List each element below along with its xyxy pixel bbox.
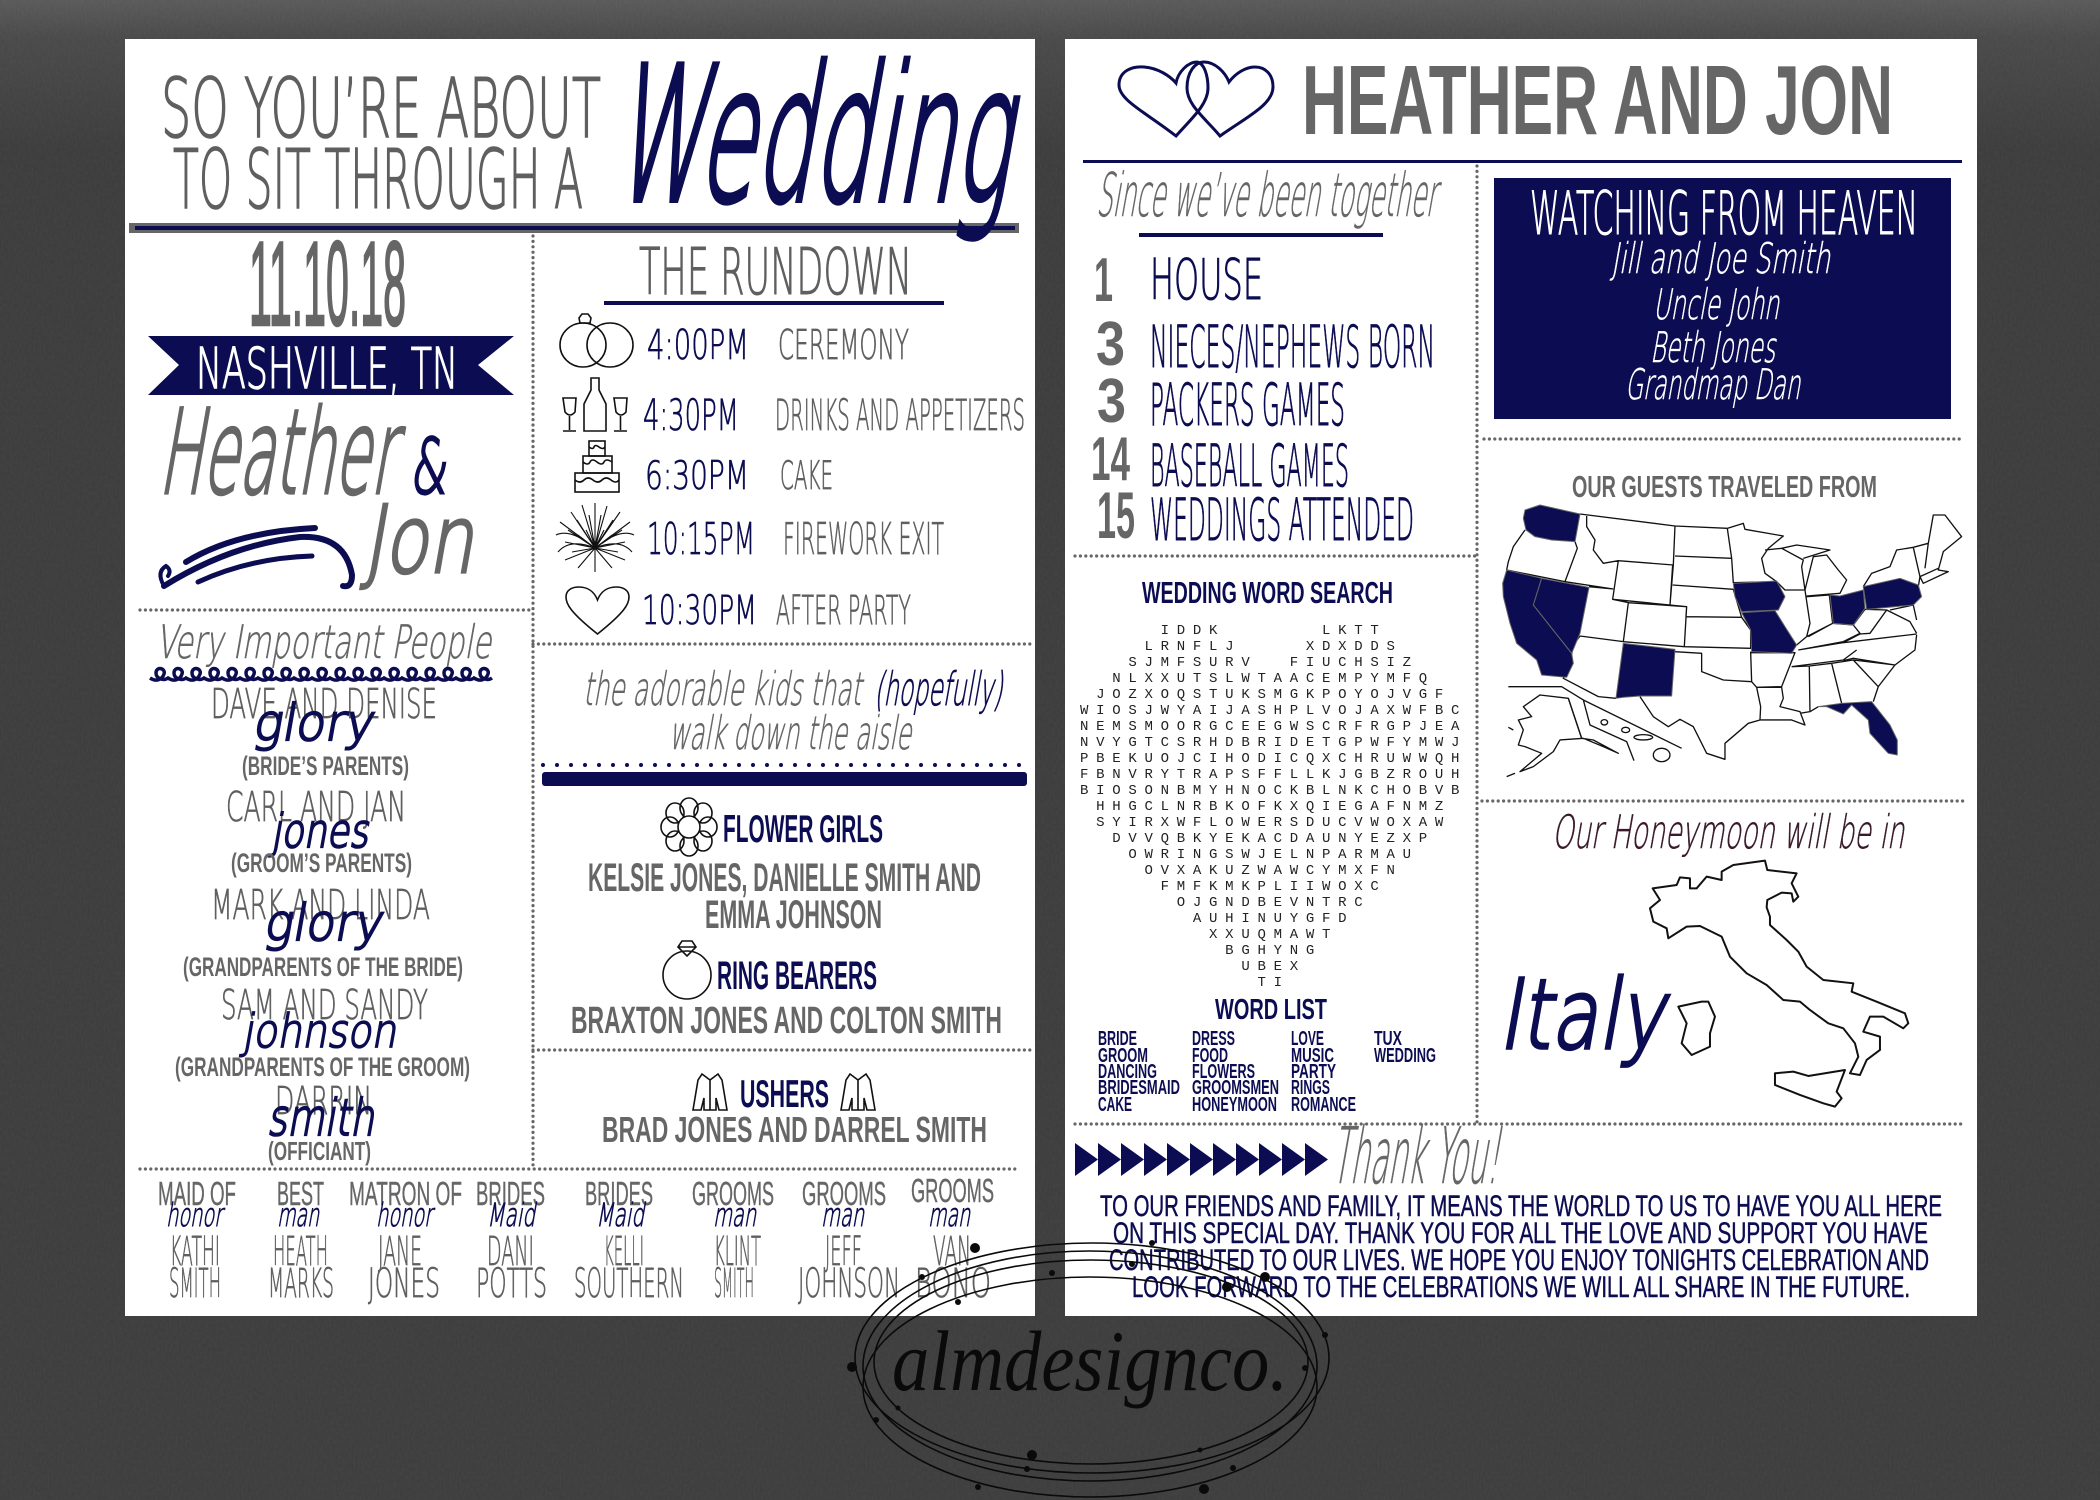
- heading: since we've been together: [1093, 161, 1446, 237]
- schedule item: drinks: 4:30PM: [643, 391, 739, 441]
- word search letter grid: SYIRXWFLOWERSDUCVWOXAW: [1080, 815, 1451, 831]
- party member: grooms man klint: man: [712, 1196, 761, 1234]
- schedule item: cake: CAKE: [780, 454, 833, 499]
- vip: officiant: DARRIN: [275, 1079, 372, 1123]
- arrow row: [1075, 1143, 1328, 1176]
- heading: adorable kids: walk down the aisle: [667, 706, 919, 760]
- vip: grandparents of the groom: [175, 981, 470, 1082]
- word search letter grid: FBNVRYTRAPSFFLLKJGBZROUH: [1080, 767, 1467, 783]
- party member: maid of honor: SMITH: [169, 1261, 221, 1307]
- thank you message: [1100, 1190, 1942, 1304]
- party member: matron of honor: JANE: [378, 1229, 422, 1275]
- stat: 15 weddings attended: 15: [1097, 478, 1135, 552]
- word list column 2: FOOD: [1192, 1045, 1228, 1067]
- flourish: [150, 669, 492, 680]
- word search letter grid: PBEKUOJCIHODICQXCHRUWWQH: [1080, 751, 1467, 767]
- word list column 3: RINGS: [1291, 1077, 1330, 1099]
- schedule item: firework exit: [647, 514, 944, 565]
- couple names script: Heather: [153, 385, 413, 521]
- swoosh ornament: [160, 528, 352, 586]
- party member: grooms man jeff: JOHNSON: [798, 1261, 900, 1307]
- party member: grooms man jeff: GROOMS: [802, 1175, 886, 1212]
- icon: tuxedo left: [693, 1074, 727, 1110]
- vip: grandparents of the groom: SAM AND SANDY: [221, 981, 428, 1029]
- stat: 14 baseball games: 14: [1091, 425, 1130, 494]
- word list column 3: ROMANCE: [1291, 1094, 1356, 1116]
- word list column 2: DRESS: [1192, 1028, 1235, 1050]
- icon: cake: [575, 441, 619, 492]
- heading: the rundown: THE RUNDOWN: [639, 236, 912, 310]
- party member: brides maid kelli: BRIDES: [585, 1175, 653, 1212]
- logo rings: [847, 1240, 1329, 1497]
- panel: wedding party: MARKS: [268, 1261, 334, 1307]
- word search letter grid: NEMSMOORGCEEGWSCRFRGPJEA: [1080, 719, 1467, 735]
- icon: rings: [560, 314, 633, 367]
- schedule item: after party: [642, 588, 911, 634]
- stat: 1 house: HOUSE: [1150, 248, 1263, 313]
- ring bearer names: BRAXTON JONES AND COLTON SMITH: [571, 1000, 1002, 1042]
- vip: bride's parents: glory: [250, 693, 380, 752]
- vip: grandparents of the bride: (GRANDPARENTS OF THE BRIDE): [183, 952, 463, 982]
- party member: maid of honor: MAID OF: [158, 1175, 236, 1212]
- vip: grandparents of the groom: (GRANDPARENTS OF THE GROOM): [175, 1052, 470, 1082]
- title: so you're about to sit through a: SO YOU’RE ABOUT: [161, 62, 601, 157]
- icon: tuxedo right: [841, 1074, 875, 1110]
- party member: matron of honor: MATRON OF: [349, 1175, 462, 1212]
- schedule item: ceremony: CEREMONY: [778, 321, 909, 369]
- party member: grooms man klint: [692, 1175, 774, 1307]
- title: so you're about to sit through a: [161, 62, 601, 228]
- vip: grandparents of the bride: MARK AND LINDA: [211, 881, 430, 929]
- panel: right program page: [1065, 39, 1977, 1316]
- icon: heart: [566, 587, 629, 634]
- word search letter grid: HHGCLNRBKOFKXQIEGAFNMZ: [1080, 799, 1451, 815]
- party member: matron of honor: JONES: [368, 1261, 440, 1307]
- word search letter grid: SJMFSURV FIUCHSIZ: [1080, 655, 1419, 671]
- party member: brides maid kelli: KELLI: [604, 1229, 644, 1275]
- panel: left program page: [125, 28, 1038, 1316]
- schedule item: cake: 6:30PM: [645, 454, 749, 499]
- panel: the rundown: FIREWORK EXIT: [783, 514, 944, 565]
- party member: brides maid dani: BRIDES: [476, 1175, 545, 1212]
- panel: since we've been together: BASEBALL GAMES: [1150, 432, 1349, 500]
- stat: 1 house: [1094, 246, 1263, 315]
- word search letter grid: IDDK LKTT: [1080, 623, 1386, 639]
- panel: wedding party: SOUTHERN: [574, 1261, 684, 1307]
- word search letter grid: [1080, 623, 1467, 991]
- party member: best man: BEST: [277, 1175, 324, 1212]
- text: DRINKS AND APPETIZERS: [775, 391, 1025, 441]
- word list column 2: GROOMSMEN: [1192, 1077, 1279, 1099]
- word search letter grid: BIOSONBMYHNOCKBLNKCHOBVB: [1080, 783, 1467, 799]
- flower girl names: EMMA JOHNSON: [705, 893, 882, 937]
- vip: grandparents of the bride: [183, 881, 463, 982]
- icon: fireworks: [556, 503, 634, 572]
- title rule: [129, 223, 1019, 233]
- party member: grooms man van: VAN: [933, 1229, 971, 1275]
- party member: best man: man: [276, 1196, 324, 1234]
- party member: grooms man van: BONO: [915, 1261, 991, 1307]
- panel dividers: [1075, 166, 1964, 1124]
- party member: grooms man van: [911, 1172, 994, 1307]
- panel: since we've been together: PACKERS GAMES: [1150, 371, 1345, 439]
- word search letter grid: OVXAKUZWAWCYMXFN: [1080, 863, 1403, 879]
- stat: 15 weddings attended: [1097, 478, 1414, 554]
- heading: ushers: USHERS: [740, 1073, 829, 1116]
- party member: grooms man van: man: [927, 1196, 975, 1234]
- party member: grooms man jeff: man: [820, 1196, 869, 1234]
- party member: best man: [268, 1175, 334, 1307]
- word search letter grid: JOZXOQSTUKSMGKPOYOJVGF: [1080, 687, 1451, 703]
- map: united states: [1503, 505, 1962, 777]
- heading: the rundown: [604, 236, 944, 310]
- couple names script: [153, 385, 488, 595]
- vip: bride's parents: (BRIDE’S PARENTS): [242, 751, 409, 781]
- heading: adorable kids: (hopefully): [872, 662, 1010, 716]
- heading: adorable kids: [581, 662, 1010, 760]
- party member: maid of honor: honor: [165, 1196, 228, 1234]
- word search letter grid: AUHINUYGFD: [1080, 911, 1354, 927]
- panel: wedding party: [158, 1172, 994, 1307]
- word search letter grid: DVVQBKYEKACDAUNYEZXP: [1080, 831, 1435, 847]
- word list column 4: WEDDING: [1374, 1045, 1436, 1067]
- party member: grooms man van: GROOMS: [911, 1172, 994, 1209]
- word list column 1: CAKE: [1098, 1094, 1132, 1116]
- word list column 1: GROOM: [1098, 1045, 1148, 1067]
- usher names: BRAD JONES AND DARREL SMITH: [602, 1109, 987, 1150]
- vip: bride's parents: [211, 680, 437, 781]
- panel: watching from heaven: [1494, 178, 1951, 419]
- stat: 14 baseball games: [1091, 425, 1349, 500]
- panel: since we've been together: [1091, 161, 1446, 554]
- party member: matron of honor: [349, 1175, 462, 1307]
- vip: bride's parents: DAVE AND DENISE: [211, 680, 437, 728]
- names in memoriam: Jill and Joe Smith: [1609, 234, 1837, 283]
- party member: maid of honor: KATHI: [170, 1229, 220, 1275]
- vip: officiant: (OFFICIANT): [268, 1136, 371, 1166]
- word search letter grid: WIOSJWYAIJASHPLVOJAXWFBC: [1080, 703, 1467, 719]
- word list column 1: BRIDESMAID: [1098, 1077, 1180, 1099]
- word list column 3: LOVE: [1291, 1028, 1324, 1050]
- heading: ring bearers: RING BEARERS: [717, 954, 877, 998]
- party member: matron of honor: honor: [375, 1196, 438, 1234]
- panel: right program page: NIECES/NEPHEWS BORN: [1150, 313, 1435, 381]
- word search letter grid: OJGNDBEVNTRC: [1080, 895, 1370, 911]
- heading: word list: WORD LIST: [1215, 994, 1327, 1026]
- names in memoriam: Beth Jones: [1648, 323, 1782, 372]
- stat: 3 nieces/nephews born: [1096, 310, 1435, 381]
- title: wedding script: Wedding: [604, 28, 1038, 245]
- word list column 2: [1192, 1028, 1279, 1116]
- map: italy: [1650, 861, 1908, 1107]
- party member: brides maid kelli: [574, 1175, 684, 1307]
- panel: the rundown: [556, 236, 1025, 634]
- panel: word search: [1080, 575, 1467, 1116]
- panel: wedding party: SMITH: [714, 1261, 754, 1307]
- party member: brides maid dani: DANI: [487, 1229, 534, 1275]
- schedule item: firework exit: 10:15PM: [647, 514, 755, 565]
- vip: groom's parents: [226, 783, 412, 878]
- word list column 4: TUX: [1374, 1028, 1402, 1050]
- word list column 1: BRIDE: [1098, 1028, 1137, 1050]
- party member: maid of honor: [158, 1175, 236, 1307]
- schedule item: drinks: [643, 391, 1025, 441]
- heading: very important people: Very Important People: [154, 615, 499, 669]
- party member: brides maid kelli: Maid: [595, 1196, 649, 1234]
- schedule item: after party: AFTER PARTY: [776, 588, 911, 634]
- icon: flower: [661, 798, 717, 856]
- stat: 3 nieces/nephews born: 3: [1096, 310, 1125, 379]
- stat: 1 house: 1: [1094, 246, 1113, 315]
- icon: interlocked hearts: [1119, 62, 1273, 136]
- schedule item: ceremony: [647, 321, 909, 369]
- logo: almdesignco: [847, 1240, 1329, 1497]
- brush divider: [542, 765, 1027, 786]
- stat: 3 packers games: [1097, 367, 1345, 439]
- word search letter grid: NVYGTCSRHDBRIDETGPWFYMWJ: [1080, 735, 1467, 751]
- couple names script: &: [408, 422, 453, 511]
- word list column 3: PARTY: [1291, 1061, 1336, 1083]
- title: so you're about to sit through a: TO SIT THROUGH A: [173, 133, 583, 228]
- vip: grandparents of the bride: glory: [261, 893, 389, 952]
- stat: 3 packers games: 3: [1097, 367, 1126, 436]
- party member: grooms man klint: KLINT: [714, 1229, 761, 1275]
- panel: thank you: [1075, 1111, 1942, 1304]
- word search letter grid: NLXXUTSLWTAACEMPYMFQ: [1080, 671, 1435, 687]
- panel: left program page: 11.10.18: [249, 217, 406, 351]
- word search letter grid: LRNFLJ XDXDDS: [1080, 639, 1403, 655]
- vip: groom's parents: jones: [268, 804, 376, 858]
- panel: wedding party: HEATH: [273, 1229, 328, 1275]
- icon: bottle and glasses: [563, 378, 627, 431]
- heading: our guests traveled from: OUR GUESTS TRAVELED FROM: [1572, 469, 1877, 504]
- party member: brides maid dani: POTTS: [476, 1261, 547, 1307]
- flower girl names: KELSIE JONES, DANIELLE SMITH AND: [588, 856, 981, 900]
- panel: guests traveled map: [1503, 469, 1962, 777]
- vip: officiant: smith: [265, 1088, 382, 1147]
- title rule: [1083, 160, 1962, 163]
- vip: officiant: [265, 1079, 382, 1166]
- panel: right program page: Since we’ve been together: [1093, 161, 1446, 231]
- party member: grooms man jeff: JEFF: [825, 1229, 862, 1275]
- heading: adorable kids: the adorable kids that: [581, 662, 869, 716]
- party member: brides maid dani: [476, 1175, 547, 1307]
- schedule item: after party: 10:30PM: [642, 588, 757, 634]
- logo wordmark: almdesignco.: [892, 1313, 1288, 1409]
- word search letter grid: UBEX: [1080, 959, 1306, 975]
- word list column 4: [1374, 1028, 1436, 1067]
- party member: grooms man klint: GROOMS: [692, 1175, 774, 1212]
- location banner: NASHVILLE, TN: [196, 337, 458, 402]
- heading: flower girls: FLOWER GIRLS: [723, 808, 883, 851]
- word search letter grid: BGHYNG: [1080, 943, 1322, 959]
- word list column 3: [1291, 1028, 1356, 1116]
- couple names script: Jon: [359, 487, 488, 595]
- party member: grooms man jeff: [798, 1175, 900, 1307]
- word list column 1: DANCING: [1098, 1061, 1157, 1083]
- word list column 3: MUSIC: [1291, 1045, 1334, 1067]
- word list column 2: FLOWERS: [1192, 1061, 1255, 1083]
- icon: diamond ring: [663, 941, 711, 999]
- panel: thank you: Thank You!: [1328, 1111, 1511, 1202]
- flower girl names: [588, 856, 981, 937]
- location banner: [148, 336, 514, 402]
- vip: groom's parents: CARL AND JAN: [226, 783, 406, 831]
- panel: right program page: WEDDINGS ATTENDED: [1150, 486, 1414, 554]
- panel dividers: [140, 236, 1035, 1169]
- panel: honeymoon: [1494, 805, 1912, 1107]
- word search letter grid: TI: [1080, 975, 1290, 991]
- vip: grandparents of the groom: johnson: [239, 1004, 404, 1058]
- heading: wedding word search: WEDDING WORD SEARCH: [1142, 575, 1393, 610]
- word search letter grid: XXUQMAWT: [1080, 927, 1338, 943]
- label: italy: Italy: [1494, 959, 1680, 1071]
- names in memoriam: Grandmap Dan: [1623, 360, 1807, 409]
- panel: very important people: [150, 615, 499, 1166]
- panel: kids and ushers: [542, 662, 1027, 1150]
- vip: groom's parents: (GROOM’S PARENTS): [231, 848, 412, 878]
- word list column 1: [1098, 1028, 1180, 1116]
- word list column 2: HONEYMOON: [1192, 1094, 1277, 1116]
- schedule item: ceremony: 4:00PM: [647, 321, 749, 369]
- party member: brides maid dani: Maid: [486, 1196, 540, 1234]
- word search letter grid: OWRINGSWJELNPARMAU: [1080, 847, 1419, 863]
- names in memoriam: Uncle John: [1651, 280, 1786, 329]
- word search letter grid: FMFKMKPLIIWOXC: [1080, 879, 1386, 895]
- names in memoriam: [1609, 234, 1837, 409]
